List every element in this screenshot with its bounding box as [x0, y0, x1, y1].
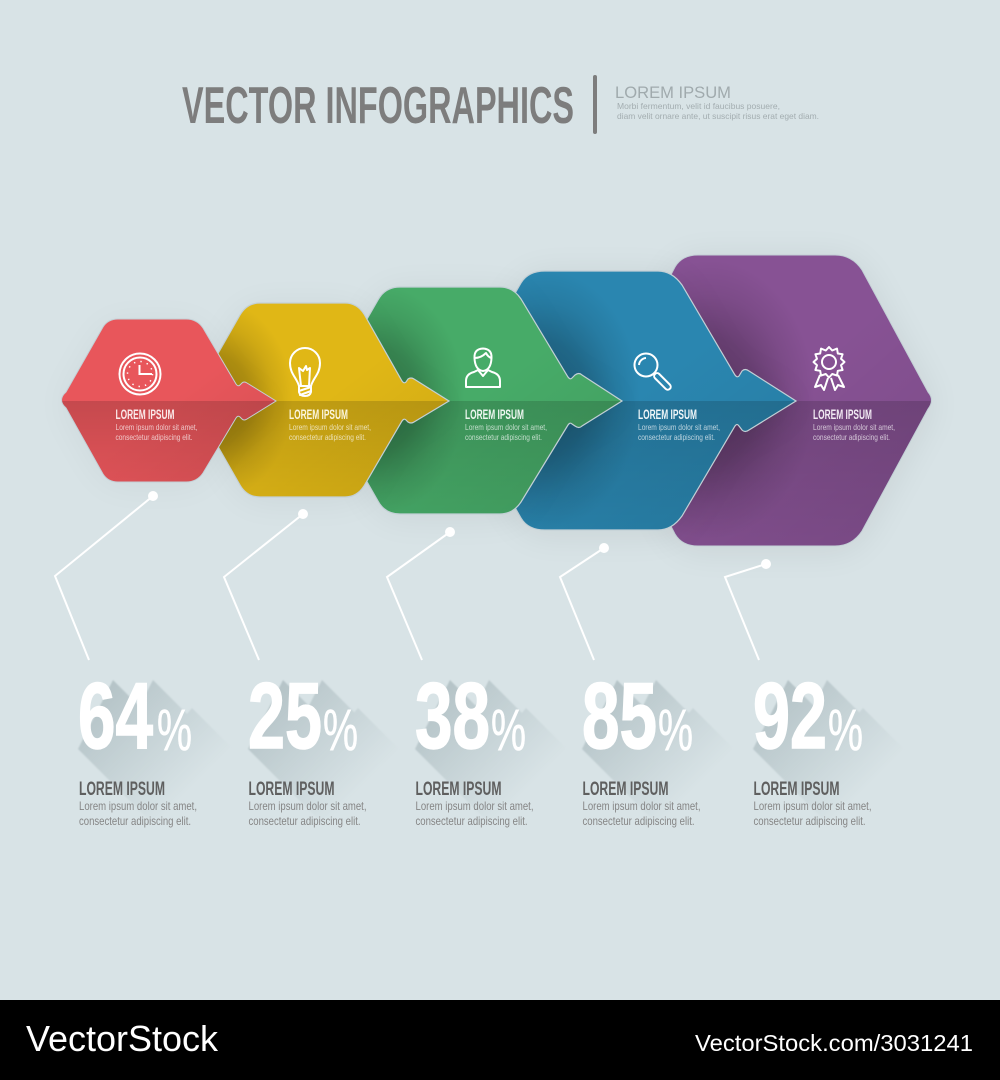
stat: 92% — [753, 663, 943, 830]
blue hexagon text: LOREM IPSUM — [638, 407, 697, 422]
connector: 85% — [560, 543, 609, 660]
stat: 64% — [78, 663, 272, 830]
stat: 25%: % — [323, 698, 358, 763]
subtitle block: LOREM IPSUM — [615, 83, 731, 102]
connector: 25% — [224, 509, 308, 660]
subtitle block — [615, 83, 819, 121]
panel: yellow hexagon — [218, 302, 450, 498]
subtitle block: Morbi fermentum, velit id faucibus posuere, — [617, 101, 780, 111]
red hexagon text: LOREM IPSUM — [116, 407, 174, 422]
green hexagon text — [465, 407, 547, 442]
stat: 25%: Lorem ipsum dolor sit amet, — [248, 799, 366, 813]
stat: 25%: 25 — [248, 663, 322, 768]
stat: 38% — [415, 663, 606, 830]
stat: 85%: 85 — [582, 663, 657, 768]
icon: award badge — [814, 347, 844, 390]
yellow hexagon text — [289, 407, 371, 442]
stat: 64%: % — [157, 698, 192, 763]
red hexagon text: Lorem ipsum dolor sit amet, — [116, 422, 198, 432]
stat: 85%: % — [658, 698, 693, 763]
stat: 38%: Lorem ipsum dolor sit amet, — [416, 799, 534, 813]
green hexagon text: Lorem ipsum dolor sit amet, — [465, 422, 547, 432]
stat: 38%: consectetur adipiscing elit. — [416, 814, 528, 828]
stat: 25% — [248, 663, 438, 830]
panel: red hexagon — [55, 319, 280, 486]
icon: light bulb — [290, 348, 320, 396]
stat: 85% — [582, 663, 773, 830]
stat: 38%: 38 — [415, 663, 490, 768]
stat: 25%: consectetur adipiscing elit. — [248, 814, 360, 828]
icon: person — [466, 348, 500, 387]
stat: 64%: consectetur adipiscing elit. — [79, 814, 191, 828]
panel: green hexagon — [367, 286, 623, 515]
stat: 38%: LOREM IPSUM — [416, 778, 502, 800]
title: VECTOR INFOGRAPHICS — [182, 77, 574, 135]
red hexagon text: consectetur adipiscing elit. — [116, 432, 192, 442]
blue hexagon text: consectetur adipiscing elit. — [638, 432, 715, 442]
stat: 85%: LOREM IPSUM — [582, 778, 668, 800]
connector: 38% — [387, 527, 455, 660]
stat: 64%: LOREM IPSUM — [79, 778, 165, 800]
icon: clock — [120, 354, 160, 394]
stat: 92%: % — [828, 698, 863, 763]
blue hexagon text: Lorem ipsum dolor sit amet, — [638, 422, 720, 432]
stat: 64%: 64 — [78, 663, 153, 768]
purple hexagon text: Lorem ipsum dolor sit amet, — [813, 422, 895, 432]
stat: 92%: 92 — [753, 663, 827, 768]
footer bar — [0, 1000, 1000, 1080]
stat: 85%: consectetur adipiscing elit. — [582, 814, 694, 828]
yellow hexagon text: LOREM IPSUM — [289, 407, 348, 422]
panel: purple hexagon — [671, 254, 932, 552]
footer url: VectorStock.com/3031241 — [695, 1030, 973, 1056]
panel: blue hexagon — [514, 270, 797, 536]
title divider — [593, 75, 597, 134]
stat: 92%: Lorem ipsum dolor sit amet, — [754, 799, 872, 813]
blue hexagon text — [638, 407, 720, 442]
footer logo: VectorStock — [26, 1018, 219, 1059]
stat: 25%: LOREM IPSUM — [248, 778, 334, 800]
stat: 64%: Lorem ipsum dolor sit amet, — [79, 799, 197, 813]
purple hexagon text: LOREM IPSUM — [813, 407, 872, 422]
stat: 92%: LOREM IPSUM — [754, 778, 840, 800]
stat: 92%: consectetur adipiscing elit. — [754, 814, 866, 828]
purple hexagon text — [813, 407, 895, 442]
yellow hexagon text: Lorem ipsum dolor sit amet, — [289, 422, 371, 432]
green hexagon text: LOREM IPSUM — [465, 407, 524, 422]
green hexagon text: consectetur adipiscing elit. — [465, 432, 542, 442]
stat: 38%: % — [491, 698, 526, 763]
stat: 85%: Lorem ipsum dolor sit amet, — [582, 799, 700, 813]
connector: 64% — [55, 491, 158, 660]
subtitle block: diam velit ornare ante, ut suscipit risus erat eget diam. — [617, 111, 819, 121]
connector: 92% — [725, 559, 771, 660]
red hexagon text — [116, 407, 198, 442]
purple hexagon text: consectetur adipiscing elit. — [813, 432, 890, 442]
yellow hexagon text: consectetur adipiscing elit. — [289, 432, 366, 442]
icon: magnifier — [634, 354, 672, 391]
